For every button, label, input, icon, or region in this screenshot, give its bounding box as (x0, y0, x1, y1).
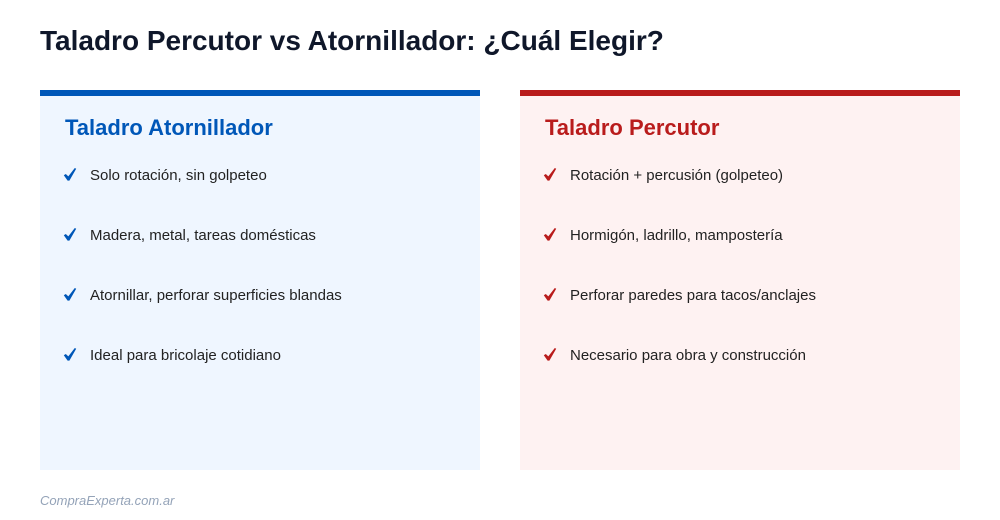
list item 1: Rotación + percusión (golpeteo) (570, 167, 783, 184)
list item 2: Madera, metal, tareas domésticas (90, 227, 316, 244)
panel: Taladro Percutor (520, 90, 960, 470)
icon: check (64, 348, 76, 361)
list item 3: Atornillar, perforar superficies blandas (90, 287, 342, 304)
list item 2: Hormigón, ladrillo, mampostería (570, 227, 783, 244)
icon: check (544, 228, 556, 241)
panel: Taladro Atornillador (40, 90, 480, 470)
icon: check (544, 348, 556, 361)
heading: Taladro Atornillador: Taladro Atornillador (65, 115, 273, 140)
footer credit: CompraExperta.com.ar (40, 493, 174, 508)
icon: check (544, 168, 556, 181)
icon: check (64, 168, 76, 181)
icon: check (544, 288, 556, 301)
list item 1: Solo rotación, sin golpeteo (90, 167, 267, 184)
title: Taladro Percutor vs Atornillador: ¿Cuál Elegir? (40, 25, 664, 56)
heading: Taladro Percutor: Taladro Percutor (545, 115, 719, 140)
icon: check (64, 288, 76, 301)
list item 4: Necesario para obra y construcción (570, 347, 806, 364)
icon: check (64, 228, 76, 241)
list item 3: Perforar paredes para tacos/anclajes (570, 287, 816, 304)
list item 4: Ideal para bricolaje cotidiano (90, 347, 281, 364)
